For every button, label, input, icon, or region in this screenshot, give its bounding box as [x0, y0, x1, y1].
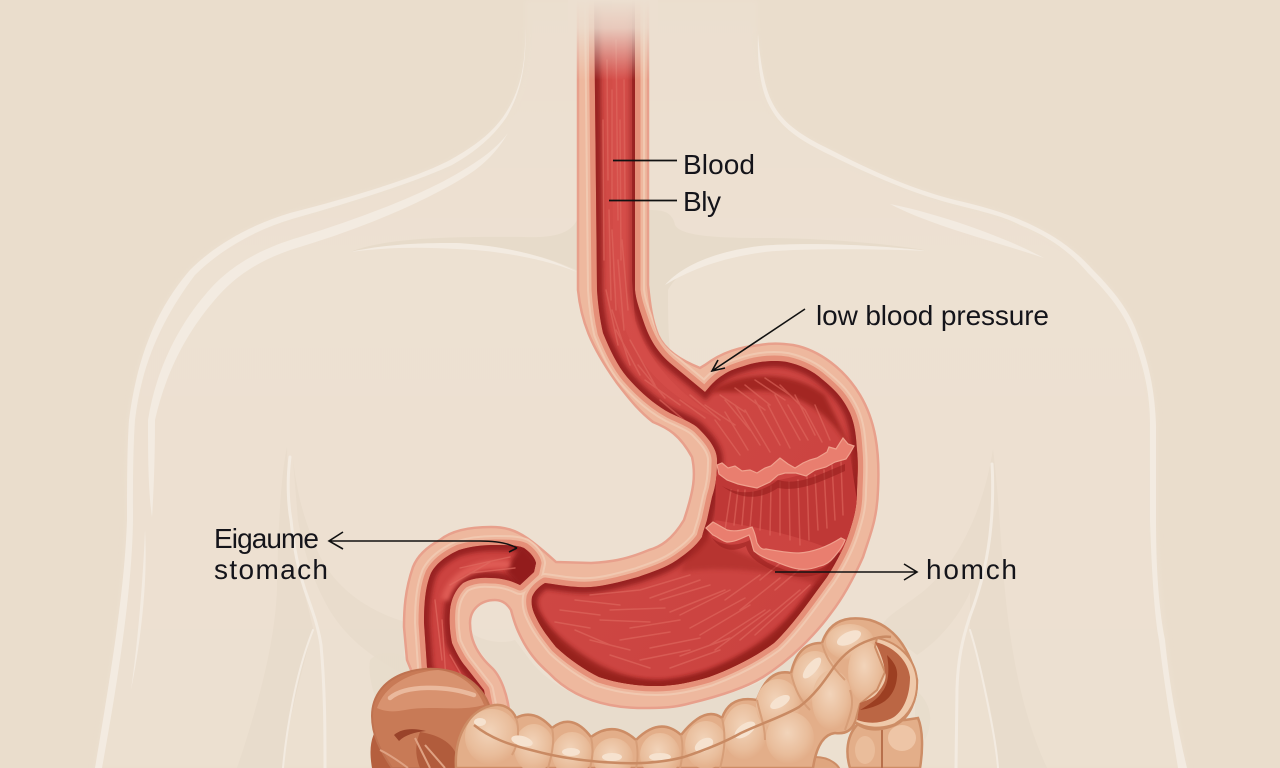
- label: low blood pressure with arrow: [712, 300, 1049, 371]
- digestive tract: esophagus and stomach wall: [404, 0, 878, 722]
- body shading: clavicles, hips and abdomen: [237, 210, 1047, 768]
- intestines: [371, 618, 922, 768]
- label: homch with arrow: [775, 554, 1017, 585]
- colon taenia seam: [474, 637, 891, 763]
- label: Eigaume stomach with arrow: Eigaume: [214, 523, 319, 554]
- colon lobe folds: [512, 643, 852, 768]
- label: Bly: [609, 186, 721, 217]
- label: Bly: Bly: [683, 186, 721, 217]
- stomach interior with muscle fibres: [530, 0, 862, 700]
- ulcerated mucosa band: upper: [717, 438, 854, 497]
- label: Eigaume stomach with arrow: [214, 523, 517, 585]
- label: Blood: Blood: [683, 149, 755, 180]
- pyloric duodenum interior: [424, 545, 536, 695]
- label: low blood pressure with arrow: low blood pressure: [816, 300, 1049, 331]
- colon highlights: [474, 627, 863, 761]
- colon ring end: [855, 638, 917, 728]
- label: homch with arrow: homch: [926, 554, 1017, 585]
- label: Eigaume stomach with arrow: stomach: [214, 554, 328, 585]
- colon lobes: [465, 624, 884, 768]
- ulcerated mucosa band: lower: [706, 522, 845, 577]
- transverse colon body: [456, 618, 917, 768]
- descending colon: [847, 718, 922, 768]
- cecum lobe: [372, 669, 490, 768]
- small intestine lobes, lower left: [371, 720, 470, 768]
- esophagus fade at top: [568, 0, 658, 80]
- lower colon loop: [789, 757, 841, 768]
